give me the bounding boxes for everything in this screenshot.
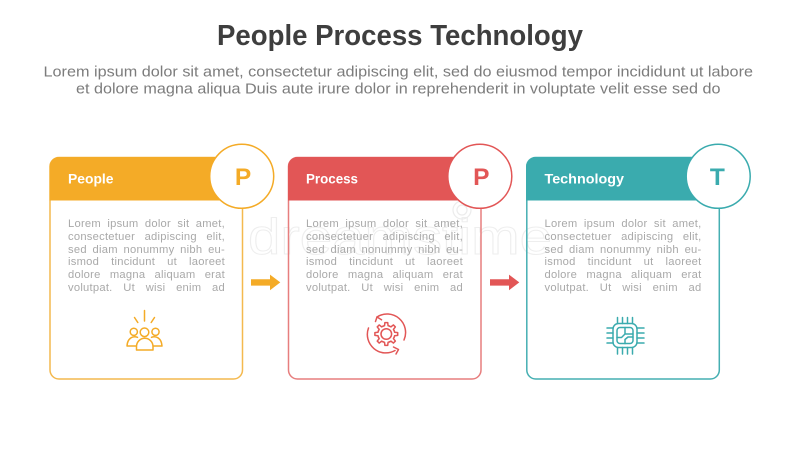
body text: Lorem ipsum dolor sit amet,	[68, 218, 225, 230]
letter badge	[448, 144, 512, 208]
body text: sed diam nonummy nibh eu-	[306, 244, 463, 256]
header bar	[50, 157, 243, 200]
panel: people	[49, 144, 274, 380]
letter badge: P	[473, 164, 489, 191]
body text: volutpat. Ut wisi enim ad	[306, 282, 463, 294]
header label: Process	[306, 171, 358, 186]
body text: ismod tincidunt ut laoreet	[306, 256, 463, 268]
letter badge	[210, 144, 274, 208]
body text: ismod tincidunt ut laoreet	[544, 256, 702, 268]
icon: people	[127, 310, 162, 350]
card outline	[50, 158, 242, 379]
subtitle text: Lorem ipsum dolor sit amet, consectetur adipiscing elit, sed do eiusmod tempor incididunt ut labore	[44, 64, 753, 80]
body text: ismod tincidunt ut laoreet	[68, 256, 225, 268]
subtitle text: et dolore magna aliqua Duis aute irure dolor in reprehenderit in voluptate velit esse sed do	[76, 82, 720, 98]
text: dreamstime	[248, 209, 552, 265]
body text	[306, 218, 463, 294]
icon: gear cycle	[367, 314, 406, 354]
body text	[68, 218, 225, 294]
card outline	[527, 158, 719, 379]
subtitle text	[44, 64, 753, 98]
body text: sed diam nonummy nibh eu-	[68, 244, 225, 256]
body text: Lorem ipsum dolor sit amet,	[544, 218, 702, 230]
body text: volutpat. Ut wisi enim ad	[68, 282, 225, 294]
body text: dolore magna aliquam erat	[306, 269, 463, 281]
title: People Process Technology	[217, 20, 583, 52]
body text: Lorem ipsum dolor sit amet,	[306, 218, 463, 230]
letter badge: P	[235, 164, 251, 191]
header label: People	[68, 171, 114, 186]
header label: Technology	[544, 171, 625, 186]
letter badge	[686, 144, 750, 208]
body text: consectetuer adipiscing elit,	[544, 231, 702, 243]
body text: consectetuer adipiscing elit,	[306, 231, 463, 243]
panel: technology	[526, 144, 751, 380]
card outline	[288, 158, 481, 379]
body text: dolore magna aliquam erat	[544, 269, 702, 281]
arrow: people to process	[251, 274, 280, 290]
icon: chip	[607, 318, 644, 354]
letter badge: T	[710, 164, 725, 191]
header bar	[288, 157, 481, 200]
body text: sed diam nonummy nibh eu-	[544, 244, 702, 256]
header bar	[526, 157, 719, 200]
body text: consectetuer adipiscing elit,	[68, 231, 225, 243]
panel: process	[288, 144, 513, 380]
body text: volutpat. Ut wisi enim ad	[544, 282, 702, 294]
body text: dolore magna aliquam erat	[68, 269, 225, 281]
arrow: process to technology	[490, 274, 520, 290]
body text	[544, 218, 702, 294]
